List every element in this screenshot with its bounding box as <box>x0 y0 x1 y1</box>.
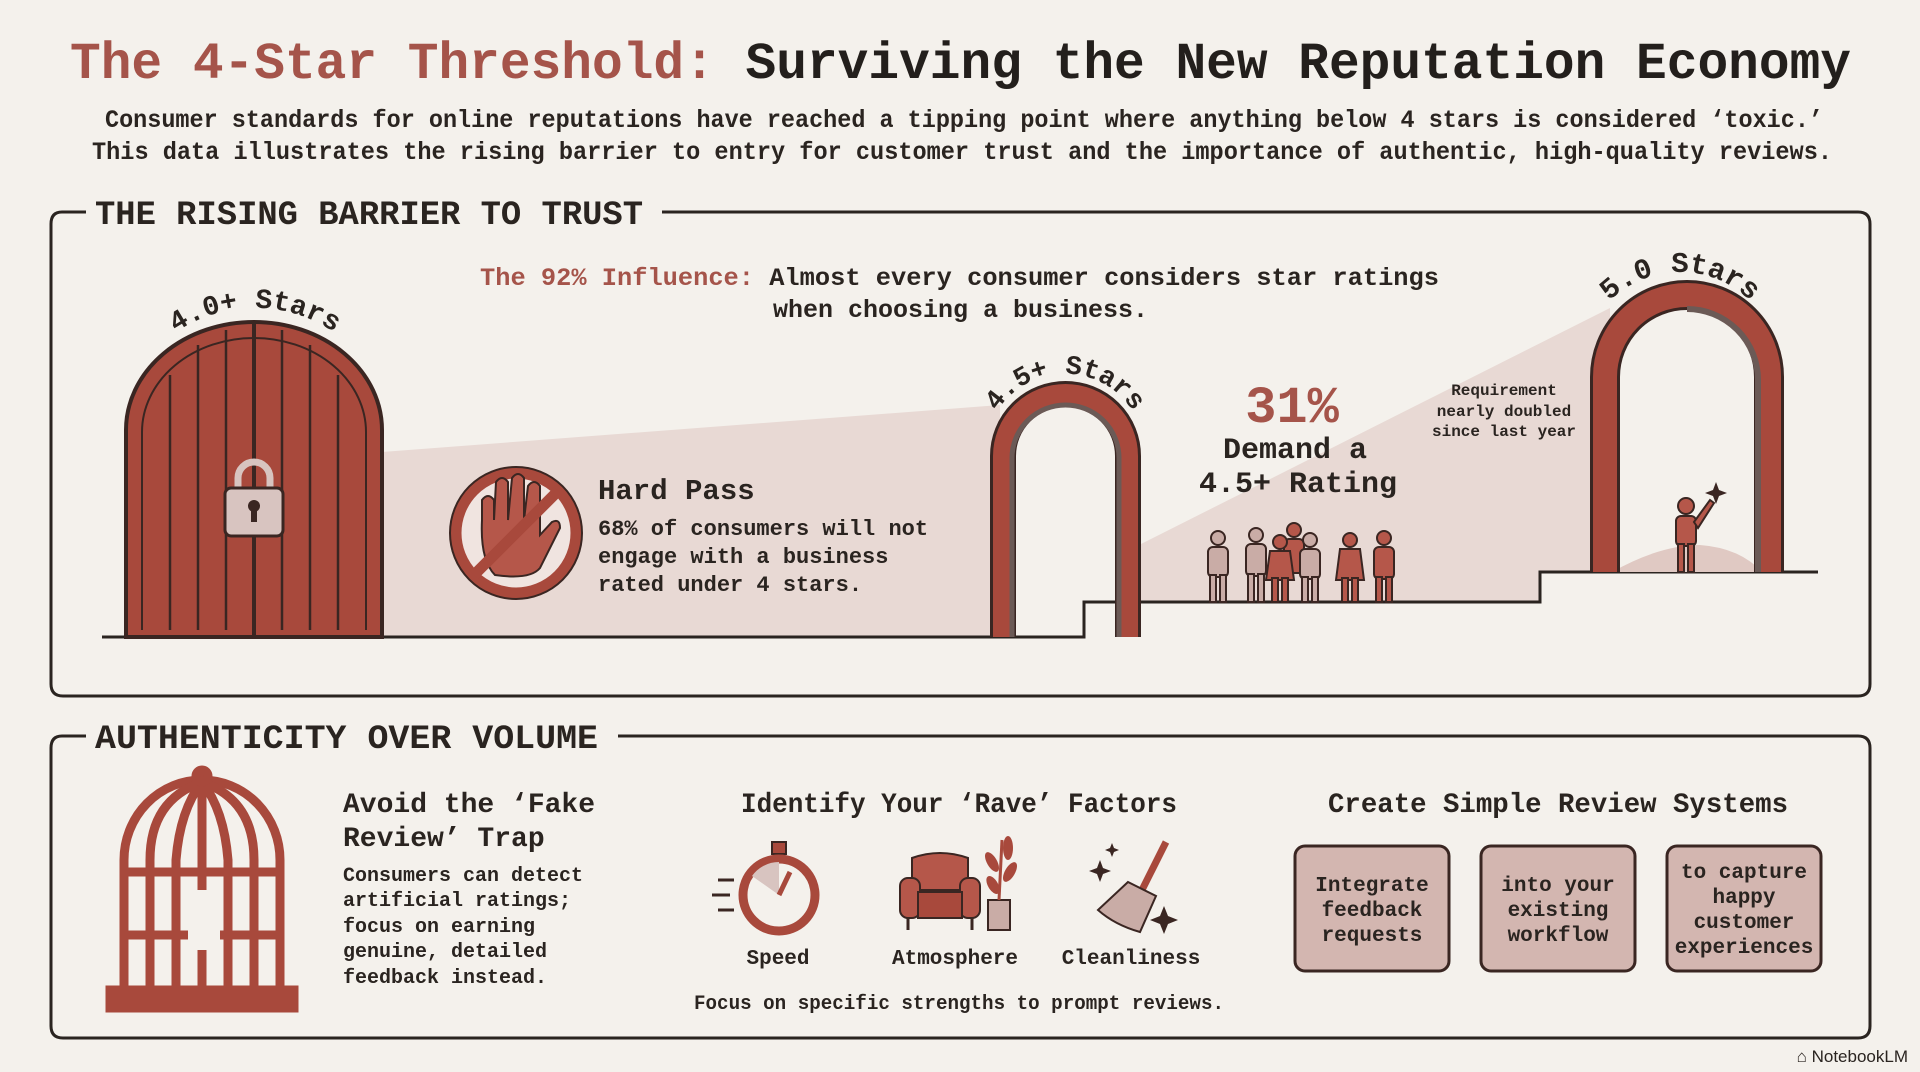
label: 4.5+ stars: 4.5+ Stars <box>988 356 1142 408</box>
box: capture: experiences <box>1675 937 1813 960</box>
subtitle: Consumer standards for online reputations have reached a tipping point where anything below 4 stars is considered ‘toxic.’ <box>105 106 1823 135</box>
label: 4.0+ stars: 4.0+ Stars <box>172 289 339 330</box>
text: hard pass <box>598 475 928 598</box>
heading: rave factors: Identify Your ‘Rave’ Factors <box>741 790 1177 821</box>
text: fake review trap: focus on earning <box>343 916 535 939</box>
box: integrate: feedback <box>1322 900 1422 923</box>
box: integrate: requests <box>1322 925 1422 948</box>
label: speed: Speed <box>746 948 810 971</box>
heading: review systems: Create Simple Review Systems <box>1328 790 1788 821</box>
footer: NotebookLM: ⌂ NotebookLM <box>1797 1047 1908 1066</box>
text: fake review trap: artificial ratings; <box>343 890 571 913</box>
text: 92% influence: when choosing a business. <box>773 296 1148 325</box>
panel: rising barrier to trust <box>50 197 1872 698</box>
subtitle <box>92 106 1832 167</box>
label: 4.0+ stars <box>172 289 339 330</box>
text: hard pass: 68% of consumers will not <box>598 517 928 542</box>
ground steps <box>102 572 1818 637</box>
icon: arch 4.5 <box>1003 394 1128 637</box>
note: requirement doubled: since last year <box>1432 423 1576 441</box>
note: requirement doubled: Requirement <box>1451 382 1557 400</box>
title: The 4-Star Threshold: Surviving the New Reputation Economy <box>70 35 1851 94</box>
icon: arch 5.0 <box>1605 295 1769 572</box>
stat: 31%: 31% <box>1245 379 1340 438</box>
text: 92% influence: The 92% Influence: Almost every consumer considers star ratings <box>480 264 1439 293</box>
label: cleanliness: Cleanliness <box>1062 948 1200 971</box>
light wedge 2 <box>1139 308 1610 602</box>
icon: crowd <box>1208 523 1394 602</box>
text: 92% influence <box>480 264 1439 325</box>
stat: 31%: 4.5+ Rating <box>1199 468 1397 502</box>
icon: stopwatch <box>712 842 815 931</box>
text: hard pass: rated under 4 stars. <box>598 573 862 598</box>
icon: broken cage <box>110 770 294 1008</box>
box: workflow <box>1481 846 1635 971</box>
stat: 31%: Demand a <box>1223 434 1367 468</box>
text: fake review trap: Consumers can detect <box>343 865 583 888</box>
icon: no hand <box>450 467 582 599</box>
caption: focus on strengths: Focus on specific strengths to prompt reviews. <box>694 993 1224 1016</box>
subtitle: This data illustrates the rising barrier to entry for customer trust and the importance of authentic, high-quality reviews. <box>92 138 1832 167</box>
label: atmosphere: Atmosphere <box>892 948 1018 971</box>
text: fake review trap: genuine, detailed <box>343 941 547 964</box>
text: fake review trap: Avoid the ‘Fake <box>343 790 595 821</box>
box: workflow: into your <box>1501 875 1615 898</box>
light wedge 1 <box>382 405 1000 637</box>
box: integrate <box>1295 846 1449 971</box>
box: workflow: workflow <box>1508 925 1609 948</box>
box: integrate: Integrate <box>1315 875 1429 898</box>
text: hard pass: engage with a business <box>598 545 888 570</box>
label: 5.0 stars <box>1599 252 1758 298</box>
stat: 31% <box>1199 379 1397 502</box>
box: capture <box>1667 846 1821 971</box>
icon: armchair and plant <box>900 836 1020 930</box>
box: workflow: existing <box>1508 900 1608 923</box>
panel: authenticity over volume <box>51 721 1870 1038</box>
text: fake review trap: Review’ Trap <box>343 824 545 855</box>
note: requirement doubled: nearly doubled <box>1437 403 1571 421</box>
text: fake review trap: feedback instead. <box>343 967 547 990</box>
icon: locked door <box>126 322 382 637</box>
label: 5.0 stars: 5.0 Stars <box>1599 252 1758 298</box>
figure reaching <box>1676 498 1714 572</box>
heading: authenticity: AUTHENTICITY OVER VOLUME <box>95 721 598 759</box>
box: capture: customer <box>1694 912 1794 935</box>
icon: broom <box>1089 842 1178 934</box>
box: capture: to capture <box>1681 862 1807 885</box>
text: fake review trap <box>343 790 595 990</box>
heading: rising barrier: THE RISING BARRIER TO TRUST <box>95 197 643 235</box>
note: requirement doubled <box>1432 382 1576 441</box>
text: hard pass: Hard Pass <box>598 475 755 508</box>
box: capture: happy <box>1712 887 1776 910</box>
